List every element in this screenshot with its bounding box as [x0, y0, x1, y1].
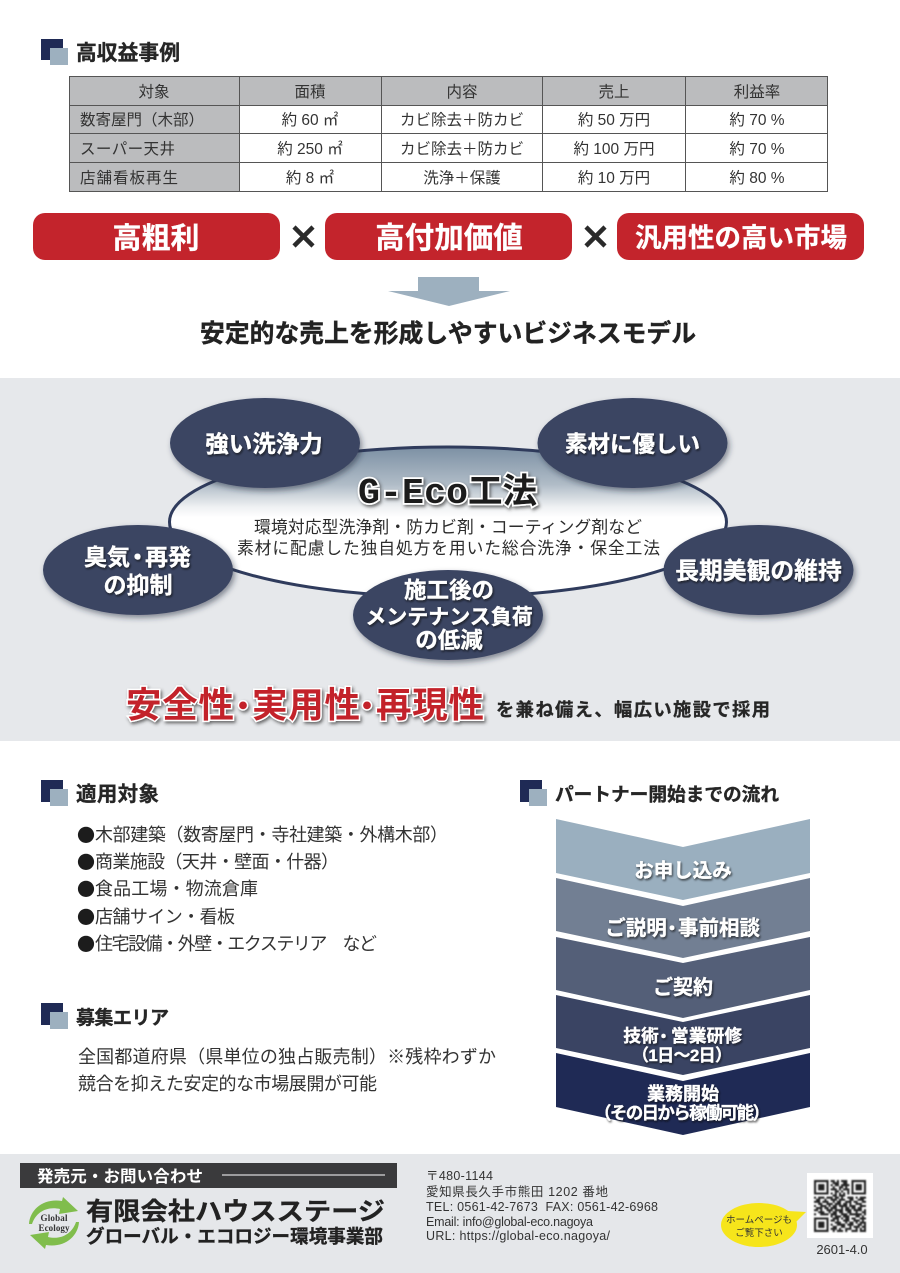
footer bar — [20, 1163, 397, 1188]
step 3: ご契約: ご契約 — [653, 975, 713, 999]
step 1: お申し込み — [556, 819, 810, 900]
central oval — [170, 447, 726, 597]
list: applicable targets: ● — [77, 904, 95, 930]
table header row: 内容 — [446, 83, 478, 101]
multiply sign — [586, 227, 605, 246]
multiply sign — [294, 227, 313, 246]
step 5: 業務開始: （その日から稼働可能） — [594, 1103, 770, 1123]
safety slogan: ・ — [228, 691, 258, 724]
step 4: 技術・営業研修: ・ — [655, 1029, 672, 1046]
method title: 工法 — [468, 473, 537, 511]
list: applicable targets: ● — [77, 876, 95, 902]
oval: 施工後のメンテナンス負荷の低減: メンテナンス負荷 — [365, 606, 533, 629]
contact details: 愛知県長久手市熊田 1202 番地 — [426, 1185, 608, 1199]
list: applicable targets: 店舗サイン・看板 — [95, 907, 235, 927]
list: applicable targets: 食品工場・物流倉庫 — [95, 879, 258, 899]
speech bubble: homepage — [721, 1203, 806, 1247]
contact details: TEL: 0561-42-7673 FAX: 0561-42-6968 — [426, 1200, 658, 1214]
red pill: 高付加価値 — [325, 213, 572, 260]
safety slogan: ・ — [352, 691, 382, 724]
table header row: 利益率 — [734, 83, 780, 101]
oval: 施工後のメンテナンス負荷の低減: 施工後の — [404, 578, 494, 603]
method description: 素材に配慮した独自処方を用いた総合洗浄・保全工法 — [237, 539, 660, 558]
table row: 数寄屋門 — [80, 111, 785, 129]
list: applicable targets: 商業施設（天井・壁面・什器） — [95, 852, 339, 872]
oval: 強い洗浄力 — [170, 398, 360, 488]
red pill: 汎用性の高い市場: 汎用性の高い市場 — [635, 223, 847, 253]
oval: 臭気・再発の抑制: 臭気 — [84, 544, 130, 570]
table row: 店舗看板再生: 約 80 % — [729, 169, 785, 187]
logo: Global Ecology — [29, 1197, 79, 1249]
oval: 施工後のメンテナンス負荷の低減 — [353, 570, 543, 660]
table row: 数寄屋門: カビ除去＋防カビ — [400, 111, 524, 129]
step 3: ご契約 — [556, 937, 810, 1018]
panel: G-Eco method band — [0, 378, 900, 741]
step 2: ご説明・事前相談 — [556, 878, 810, 958]
table header row: 売上 — [598, 83, 630, 101]
table row: 店舗看板再生: 店舗看板再生 — [80, 169, 178, 187]
step 5: 業務開始 — [556, 1053, 810, 1135]
logo: Global Ecology: Global — [40, 1213, 68, 1223]
red pill: 高付加価値: 高付加価値 — [375, 222, 523, 255]
contact details: URL: https://global-eco.nagoya/ — [426, 1229, 611, 1243]
logo: Global Ecology: Ecology — [38, 1223, 70, 1233]
table row: 数寄屋門: 約 70 % — [729, 111, 785, 129]
version code: 2601-4.0 — [816, 1242, 868, 1257]
table row: 数寄屋門: 約 60 ㎡ — [282, 111, 339, 129]
safety slogan: を兼ね備え、幅広い施設で採用 — [496, 699, 770, 720]
step 4: 技術・営業研修: 営業研修 — [671, 1026, 742, 1046]
QR code — [807, 1173, 873, 1238]
table row: 店舗看板再生: 約 10 万円 — [578, 169, 650, 187]
heading: パートナー開始までの流れ: パートナー開始までの流れ — [555, 784, 779, 805]
step 1: お申し込み: お申し込み — [634, 860, 732, 882]
table row: 数寄屋門: 数寄屋門（木部） — [80, 111, 204, 129]
step 4: 技術・営業研修: （1日～2日） — [632, 1046, 732, 1065]
contact details: Email: info@global-eco.nagoya — [426, 1215, 593, 1229]
list: applicable targets: 木部建築（数寄屋門・寺社建築・外構木部） — [95, 825, 448, 845]
arrow down — [388, 277, 510, 306]
oval: 素材に優しい — [538, 398, 728, 488]
company name: グローバル・エコロジー環境事業部 — [86, 1226, 383, 1247]
table row: スーパー天井: 約 70 % — [729, 140, 785, 158]
oval: 長期美観の維持 — [664, 525, 854, 615]
company name: 有限会社ハウスステージ — [86, 1198, 385, 1226]
speech bubble: homepage: ホームページも — [726, 1215, 792, 1226]
list: applicable targets: ● — [77, 849, 95, 875]
method description: 環境対応型洗浄剤・防カビ剤・コーティング剤など — [254, 518, 642, 537]
table row: スーパー天井: 約 250 ㎡ — [277, 140, 343, 158]
table row: スーパー天井: 約 100 万円 — [574, 140, 654, 158]
method title — [358, 473, 537, 514]
list: applicable targets: 住宅設備・外壁・エクステリア など — [95, 934, 377, 954]
list: applicable targets: ● — [77, 822, 95, 848]
safety slogan: 再現性 — [376, 685, 484, 725]
oval: 施工後のメンテナンス負荷の低減: の低減 — [415, 628, 483, 653]
step 4: 技術・営業研修 — [556, 995, 810, 1075]
text: recruiting area: 全国都道府県（県単位の独占販売制）※残枠わずか — [78, 1047, 496, 1067]
oval: 臭気・再発の抑制: 再発 — [145, 544, 191, 570]
oval: 臭気・再発の抑制: の抑制 — [104, 572, 172, 598]
heading: パートナー開始までの流れ — [520, 780, 779, 806]
table header row: 面積 — [294, 83, 326, 101]
panel: footer — [0, 1154, 900, 1273]
safety slogan: 安全性 — [126, 685, 234, 725]
red pill: 高粗利: 高粗利 — [112, 222, 200, 255]
list: applicable targets — [77, 822, 448, 957]
text: recruiting area: 競合を抑えた安定的な市場展開が可能 — [78, 1074, 377, 1094]
table header row — [138, 83, 780, 101]
heading: 高収益事例: 高収益事例 — [76, 41, 180, 65]
heading: 高収益事例 — [41, 39, 180, 65]
footer bar: 発売元・お問い合わせ — [37, 1167, 203, 1186]
safety slogan — [126, 685, 770, 725]
list: applicable targets: ● — [77, 931, 95, 957]
company name — [86, 1198, 385, 1247]
contact details — [426, 1169, 658, 1243]
text: recruiting area — [78, 1047, 496, 1094]
oval: 臭気・再発の抑制: ・ — [126, 544, 149, 570]
table row: 店舗看板再生: 洗浄＋保護 — [423, 169, 501, 187]
step 2: ご説明・事前相談: ・ — [663, 919, 681, 939]
table header row: 対象 — [138, 83, 170, 101]
step 4: 技術・営業研修: 技術 — [623, 1025, 659, 1046]
table row: 数寄屋門: 約 50 万円 — [578, 111, 650, 129]
table row: スーパー天井: スーパー天井 — [80, 140, 175, 158]
step 2: ご説明・事前相談: ご説明 — [605, 916, 667, 940]
table row: スーパー天井: カビ除去＋防カビ — [400, 140, 524, 158]
speech bubble: homepage: ご覧下さい — [735, 1227, 783, 1239]
oval: 素材に優しい: 素材に優しい — [565, 432, 700, 457]
red pill: 汎用性の高い市場 — [617, 213, 864, 260]
table row: スーパー天井 — [80, 140, 785, 158]
table: high-profit cases — [69, 76, 828, 192]
table row: 店舗看板再生: 約 8 ㎡ — [286, 169, 335, 187]
heading: 募集エリア: 募集エリア — [76, 1007, 169, 1029]
conclusion text: 安定的な売上を形成しやすいビジネスモデル — [200, 319, 696, 348]
oval: 強い洗浄力: 強い洗浄力 — [205, 431, 323, 457]
method description — [237, 518, 660, 558]
heading: 募集エリア — [41, 1003, 169, 1029]
contact details: 〒480-1144 — [426, 1169, 493, 1183]
step 5: 業務開始: 業務開始 — [647, 1084, 719, 1104]
oval: 長期美観の維持: 長期美観の維持 — [675, 558, 842, 585]
red pill: 高粗利 — [33, 213, 280, 260]
oval: 臭気・再発の抑制 — [43, 525, 233, 615]
method title: G-Eco — [358, 473, 468, 514]
heading: 適用対象: 適用対象 — [76, 782, 159, 806]
table row: 店舗看板再生 — [80, 169, 785, 187]
heading: 適用対象 — [41, 780, 159, 806]
step 2: ご説明・事前相談: 事前相談 — [678, 917, 760, 940]
safety slogan: 実用性 — [252, 685, 360, 725]
flow chart: partner steps — [556, 819, 810, 1135]
